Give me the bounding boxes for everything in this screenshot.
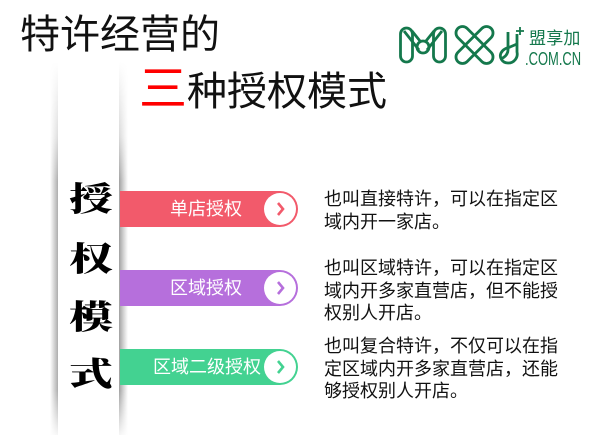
description: single store: 域内开一家店。 bbox=[324, 212, 450, 232]
description: regional two-tier bbox=[324, 336, 558, 401]
description: single store: 也叫直接特许，可以在指定区 bbox=[324, 189, 558, 209]
description: regional bbox=[324, 258, 558, 323]
vertical heading: 式: 式 bbox=[69, 348, 113, 395]
icon: chevron circle bbox=[264, 351, 296, 383]
button label: 区域二级授权 bbox=[153, 357, 261, 377]
logo text: domain: .COM.CN bbox=[525, 49, 581, 69]
description: single store bbox=[324, 189, 558, 232]
description: regional two-tier: 够授权别人开店。 bbox=[324, 381, 468, 401]
vertical heading: 模: 模 bbox=[69, 291, 113, 338]
icon: logo letter M bbox=[400, 28, 446, 62]
vertical heading: 权: 权 bbox=[69, 233, 113, 280]
description: regional two-tier: 定区域内开多家直营店，还能 bbox=[324, 358, 558, 378]
button label: 区域授权 bbox=[170, 278, 242, 298]
button: regional bbox=[120, 270, 298, 306]
icon: chevron circle bbox=[264, 272, 296, 304]
logo text: brand name: 盟享加 bbox=[529, 29, 581, 48]
icon: logo letter X bbox=[453, 24, 496, 66]
icon: chevron circle bbox=[264, 193, 296, 225]
description: regional: 权别人开店。 bbox=[324, 303, 432, 323]
title line 1: 特许经营的 bbox=[20, 13, 220, 57]
description: regional: 域内开多家直营店，但不能授 bbox=[324, 280, 558, 300]
title line 2: 三种授权模式 bbox=[139, 63, 387, 116]
vertical heading: 授: 授 bbox=[69, 173, 113, 220]
button label: 单店授权 bbox=[170, 199, 242, 219]
icon: logo letter J with plus bbox=[500, 27, 524, 63]
button: single store bbox=[120, 191, 298, 227]
button: regional two-tier bbox=[120, 349, 298, 385]
description: regional two-tier: 也叫复合特许，不仅可以在指 bbox=[324, 336, 558, 356]
logo bbox=[399, 25, 581, 69]
vertical column shadow band bbox=[51, 79, 127, 435]
description: regional: 也叫区域特许，可以在指定区 bbox=[324, 258, 558, 278]
